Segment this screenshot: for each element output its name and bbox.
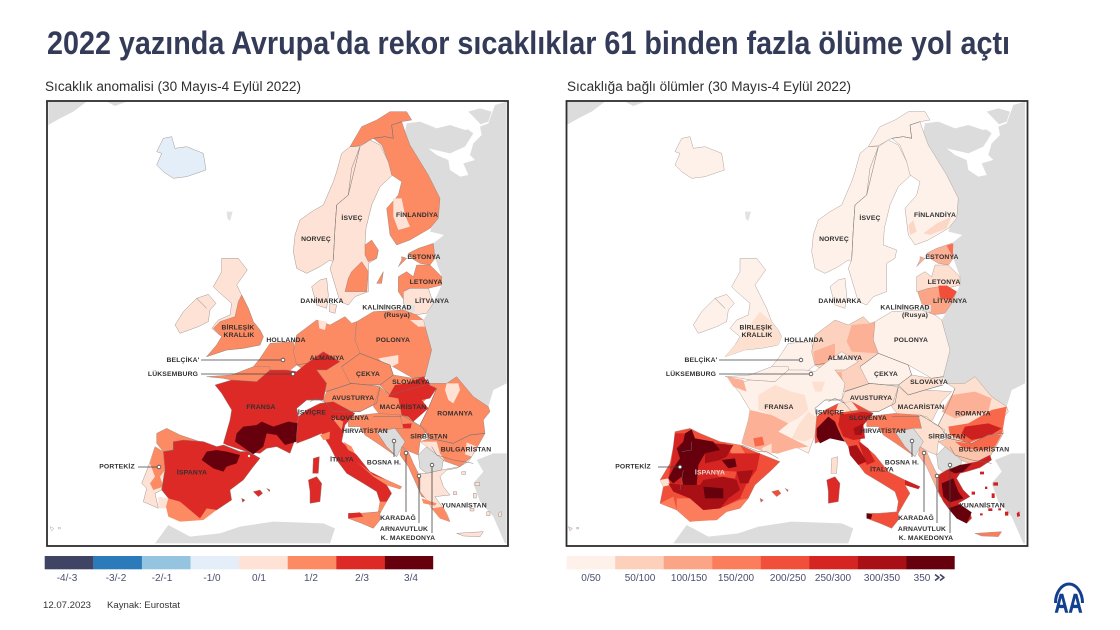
italy and islands xyxy=(815,402,920,528)
panel: temperature anomaly map xyxy=(47,101,508,546)
france xyxy=(207,352,340,454)
map labels: left: ESTONYA xyxy=(407,254,441,261)
map labels: right: ÇEKYA xyxy=(874,371,898,378)
iceland xyxy=(157,137,206,178)
britain and ireland xyxy=(693,258,782,357)
legend: heat related deaths: 50/100 xyxy=(625,573,656,584)
legend: temperature anomaly: 2/3 xyxy=(355,573,369,584)
map labels: right: HIRVATİSTAN xyxy=(860,427,906,435)
france xyxy=(725,352,858,455)
denmark xyxy=(312,278,337,313)
map labels: right: SLOVENYA xyxy=(849,415,887,422)
map labels: left: YUNANİSTAN xyxy=(441,502,487,510)
map labels: right: İTALYA xyxy=(870,466,894,474)
map labels: right: DANİMARKA xyxy=(818,297,862,305)
map labels: left: BULGARİSTAN xyxy=(441,446,491,454)
map labels: right: KARADAĞ xyxy=(898,513,934,522)
map labels: right: LİTVANYA xyxy=(933,297,967,305)
map labels: right: AVUSTURYA xyxy=(850,395,892,402)
map labels: right: KRALLIK xyxy=(742,332,772,339)
map labels: right: İSVİÇRE xyxy=(816,408,844,416)
map labels: left: LETONYA xyxy=(410,279,442,286)
map labels: left: LİTVANYA xyxy=(415,297,449,305)
map labels: right: FRANSA xyxy=(764,404,794,411)
map labels: right: (Rusya) xyxy=(902,312,928,319)
legend: temperature anomaly: -1/0 xyxy=(203,573,221,584)
icon: AA logo xyxy=(1054,584,1082,618)
leader lines: left xyxy=(138,358,434,533)
map labels: right: BİRLEŞİK xyxy=(740,324,772,332)
italy and islands xyxy=(297,402,402,528)
footer date: 12.07.2023 xyxy=(43,600,91,610)
heading: deaths map: Sıcaklığa bağlı ölümler (30 Mayıs-4 Eylül 2022) xyxy=(567,79,851,94)
legend: temperature anomaly: 0/1 xyxy=(252,573,266,584)
map labels: left: LÜKSEMBURG xyxy=(148,369,198,378)
map labels: left: (Rusya) xyxy=(384,312,410,319)
map labels: left: MACARİSTAN xyxy=(380,403,426,411)
britain and ireland xyxy=(175,258,263,357)
central europe xyxy=(253,310,490,443)
map labels: right: ARNAVUTLUK xyxy=(898,526,946,533)
map labels: right: YUNANİSTAN xyxy=(959,502,1005,510)
map labels: right: ESTONYA xyxy=(925,254,959,261)
legend: heat related deaths: 100/150 xyxy=(671,573,708,584)
map labels: left: ROMANYA xyxy=(437,410,473,418)
footer source: Kaynak: Eurostat xyxy=(107,600,181,610)
map labels: right: LETONYA xyxy=(928,279,960,286)
map labels: left: ARNAVUTLUK xyxy=(380,526,428,533)
map labels: left: BELÇİKA' xyxy=(166,356,200,364)
legend: heat related deaths: 350 xyxy=(914,573,931,584)
iceland and nordics xyxy=(675,112,958,308)
legend: temperature anomaly: -3/-2 xyxy=(106,573,127,584)
map labels: right: FİNLANDİYA xyxy=(914,211,956,219)
legend: heat related deaths: 300/350 xyxy=(864,573,901,584)
map labels: left: İSVEÇ xyxy=(341,214,363,222)
map labels: left: KARADAĞ xyxy=(380,513,416,522)
iberia xyxy=(660,428,788,522)
map labels: right: KALİNİNGRAD xyxy=(880,304,930,312)
map labels: left: KRALLIK xyxy=(224,332,254,339)
map labels: left: SLOVAKYA xyxy=(392,379,430,386)
map labels: left: NORVEÇ xyxy=(301,236,331,243)
map labels: right xyxy=(615,211,1009,542)
map labels: left: DANİMARKA xyxy=(300,297,344,305)
map labels: right: K. MAKEDONYA xyxy=(899,535,953,542)
map labels: left: SLOVENYA xyxy=(331,415,369,422)
map labels: right: BULGARİSTAN xyxy=(959,446,1009,454)
title: 2022 yazında Avrupa'da rekor sıcaklıklar 61 binden fazla ölüme yol açtı xyxy=(47,25,1010,61)
map labels: right: ALMANYA xyxy=(828,355,862,362)
balkans xyxy=(348,413,502,537)
map labels: right: BOSNA H. xyxy=(885,460,919,466)
map labels: left: FRANSA xyxy=(246,404,276,411)
map labels: left: POLONYA xyxy=(376,337,410,344)
map labels: left: ALMANYA xyxy=(310,355,344,362)
legend: temperature anomaly: -2/-1 xyxy=(152,573,173,584)
map labels: left: PORTEKİZ xyxy=(99,462,135,470)
map labels: right: ROMANYA xyxy=(955,410,991,418)
map labels: left: BOSNA H. xyxy=(367,460,401,466)
map labels: left: HOLLANDA xyxy=(266,337,306,344)
map labels: left: ÇEKYA xyxy=(356,371,380,378)
map labels: left xyxy=(99,211,491,542)
legend: heat related deaths: 200/250 xyxy=(770,573,807,584)
map labels: right: BELÇİKA' xyxy=(684,356,718,364)
map labels: right: PORTEKİZ xyxy=(615,462,651,470)
map labels: right: İSPANYA xyxy=(695,468,725,476)
map labels: left: İTALYA xyxy=(330,456,354,464)
legend: heat related deaths: 250/300 xyxy=(815,573,852,584)
map labels: right: MACARİSTAN xyxy=(898,403,944,411)
central europe xyxy=(772,310,1008,443)
map labels: left: AVUSTURYA xyxy=(332,395,374,402)
legend: heat related deaths xyxy=(567,556,955,584)
icon: AA logo: AA xyxy=(1054,588,1082,618)
map labels: left: KALİNİNGRAD xyxy=(362,304,412,312)
legend: heat related deaths: 150/200 xyxy=(718,573,755,584)
map labels: left: İSPANYA xyxy=(177,468,207,476)
map labels: right: İSVEÇ xyxy=(859,214,881,222)
map labels: right: HOLLANDA xyxy=(784,337,824,344)
map labels: left: HIRVATİSTAN xyxy=(342,427,388,435)
legend: temperature anomaly: -4/-3 xyxy=(57,573,78,584)
baltic states xyxy=(917,243,960,315)
balkans xyxy=(867,413,1020,537)
map labels: left: K. MAKEDONYA xyxy=(381,535,435,542)
map labels: right: NORVEÇ xyxy=(819,236,849,243)
legend: temperature anomaly: 3/4 xyxy=(404,573,418,584)
map labels: left: İSVİÇRE xyxy=(298,408,326,416)
baltic states xyxy=(398,243,442,315)
legend: temperature anomaly: 1/2 xyxy=(304,573,318,584)
iberia xyxy=(142,428,270,522)
map labels: right: SİRBİSTAN xyxy=(928,432,966,440)
map labels: left: SİRBİSTAN xyxy=(410,432,448,440)
map labels: left: BİRLEŞİK xyxy=(222,324,254,332)
map labels: left: FİNLANDİYA xyxy=(396,211,438,219)
nordic countries xyxy=(293,112,440,305)
legend: heat related deaths: 0/50 xyxy=(581,573,601,584)
map labels: right: POLONYA xyxy=(894,337,928,344)
heading: anomaly map: Sıcaklık anomalisi (30 Mayıs-4 Eylül 2022) xyxy=(45,79,301,94)
legend: temperature anomaly xyxy=(45,556,433,584)
map labels: right: LÜKSEMBURG xyxy=(666,369,716,378)
panel: heat related deaths map xyxy=(566,101,1028,546)
map labels: right: SLOVAKYA xyxy=(910,379,948,386)
leader lines: right xyxy=(658,358,952,533)
